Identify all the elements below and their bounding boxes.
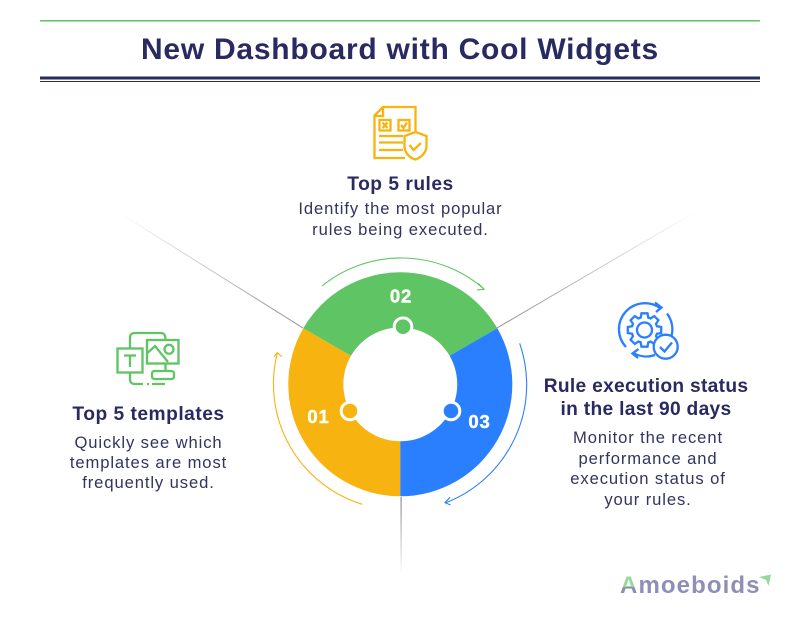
heading: rule execution status [544, 376, 748, 420]
donut chart [288, 272, 512, 496]
icon: gear with check [619, 302, 678, 359]
marker: 03 [442, 402, 460, 420]
text: rule execution description: execution status of [570, 469, 726, 488]
text: rule execution description [570, 428, 726, 508]
heading: top 5 templates: Top 5 templates [72, 404, 225, 425]
connector: right [497, 212, 695, 328]
heading: rule execution status: in the last 90 days [560, 398, 732, 420]
heading: rule execution status: Rule execution status [544, 376, 748, 397]
text: top 5 templates description: frequently used. [82, 473, 215, 492]
connector: left [118, 212, 303, 328]
heading: top 5 rules: Top 5 rules [347, 174, 454, 194]
text: top 5 templates description [70, 432, 227, 492]
icon: template screens [118, 333, 178, 384]
title: New Dashboard with Cool Widgets [141, 33, 659, 66]
segment: 02 green [303, 272, 497, 356]
icon: document with shield [374, 107, 426, 160]
text: top 5 rules description: Identify the most popular [298, 199, 503, 218]
panel: rule execution status [544, 376, 748, 508]
text: top 5 templates description: templates are most [70, 453, 227, 472]
segment: 03 blue [400, 328, 512, 496]
number 01: 01 [307, 406, 330, 427]
text: top 5 templates description: Quickly see which [74, 432, 223, 452]
arrow: green arc [322, 258, 484, 290]
panel: top 5 rules [298, 174, 503, 238]
text: top 5 rules description: rules being executed. [312, 220, 489, 238]
top rule [40, 20, 760, 22]
logo mark: arrow [759, 574, 771, 586]
text: rule execution description: Monitor the recent [573, 428, 723, 447]
panel: top 5 templates [70, 404, 227, 492]
arrow: blue arc [445, 343, 527, 505]
marker: 01 [341, 402, 359, 420]
text: top 5 rules description [298, 199, 503, 238]
logo: Amoeboids [620, 572, 761, 599]
title rule [40, 76, 760, 82]
text: rule execution description: performance and [579, 448, 717, 468]
text: rule execution description: your rules. [604, 490, 692, 508]
marker: 02 [394, 318, 412, 336]
number 03: 03 [468, 411, 491, 432]
segment: 01 orange [288, 328, 400, 496]
arrow: orange arc [273, 353, 362, 504]
number 02: 02 [390, 286, 412, 306]
connector: bottom [400, 497, 402, 576]
